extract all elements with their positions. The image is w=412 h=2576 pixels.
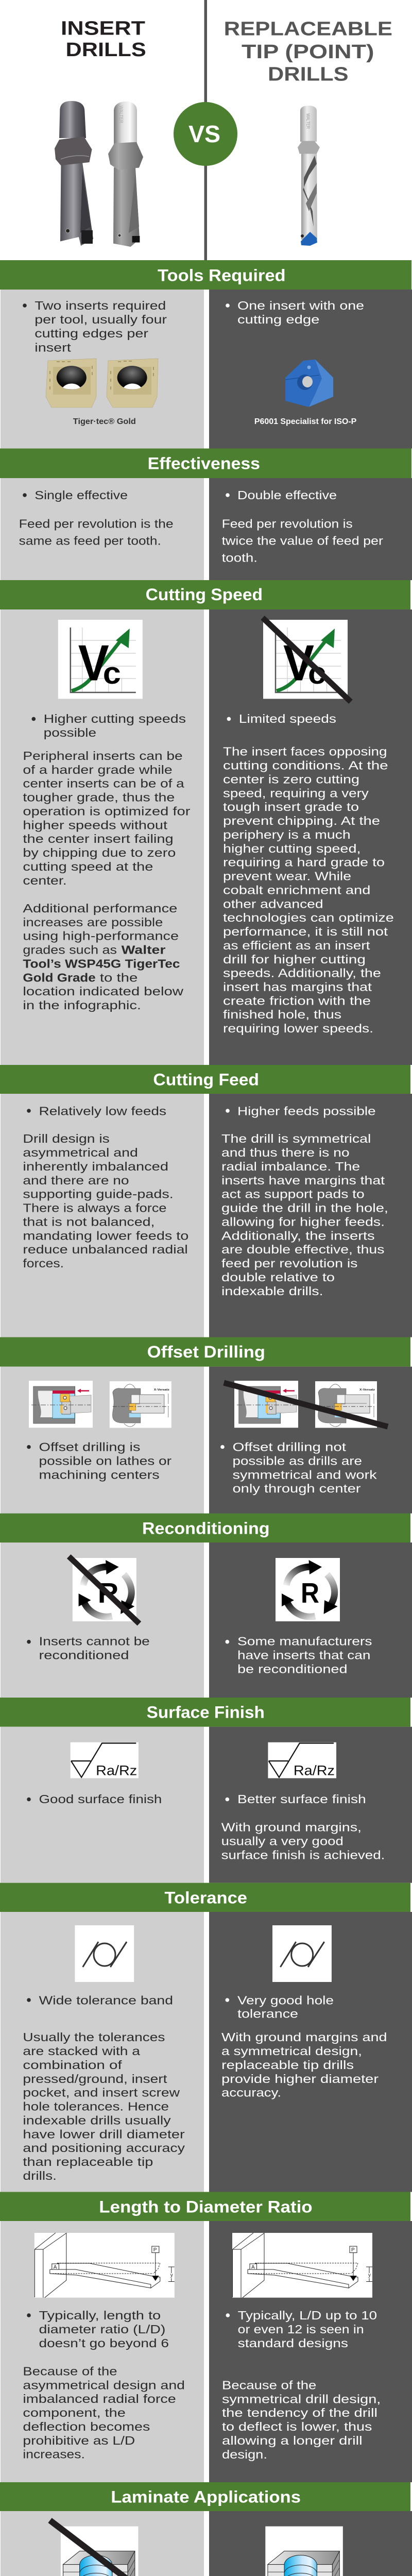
paragraph: tooth. bbox=[222, 551, 258, 564]
paragraph: There is always a force bbox=[23, 1201, 167, 1215]
heading bar: reconditioning: Reconditioning bbox=[142, 1519, 270, 1537]
bullet text: cutting edges per bbox=[35, 327, 148, 340]
paragraph: peripheral inserts: higher speeds without bbox=[23, 818, 168, 832]
paragraph: cobalt enrichment and bbox=[223, 883, 370, 896]
paragraph: Feed per revolution is the bbox=[19, 517, 174, 530]
paragraph: peripheral inserts bbox=[23, 749, 191, 887]
icon: vc chart bbox=[58, 620, 143, 699]
bullet text: Very good hole bbox=[237, 1994, 334, 2007]
paragraph: Because of the bbox=[222, 2378, 316, 2392]
paragraph: Because of the bbox=[23, 2365, 117, 2378]
title: insert drills: DRILLS bbox=[66, 39, 146, 61]
paragraph: mandating lower feeds to bbox=[23, 1229, 188, 1242]
image: dark insert drill bbox=[55, 101, 93, 246]
paragraph bbox=[23, 2365, 185, 2461]
panel: laminate, insert drills bbox=[1, 2511, 204, 2576]
bullet text: Relatively low feeds bbox=[39, 1104, 166, 1117]
bullet text bbox=[220, 1440, 377, 1495]
panel: offset drilling, replaceable tip bbox=[209, 1367, 412, 1514]
bullet text: Two inserts required bbox=[35, 299, 166, 312]
paragraph: peripheral inserts: the center insert failing bbox=[23, 832, 174, 845]
icon: offset diagram 2: X-Versatz bbox=[154, 1388, 169, 1392]
heading bar: offset drilling: Offset Drilling bbox=[147, 1343, 265, 1361]
paragraph: have lower drill diameter bbox=[23, 2127, 185, 2141]
icon: surface roughness: Ra/Rz bbox=[294, 1763, 335, 1778]
panel: tools required, insert drills bbox=[1, 290, 204, 448]
bullet text: insert bbox=[35, 341, 72, 354]
bullet text: only through center bbox=[233, 1482, 361, 1495]
title: insert drills bbox=[61, 18, 146, 61]
paragraph: asymmetrical and bbox=[23, 1146, 138, 1159]
bullet text: possible as drills are bbox=[233, 1454, 362, 1467]
bullet text: doesn’t go beyond 6 bbox=[39, 2336, 169, 2350]
paragraph: usually a very good bbox=[221, 1835, 344, 1848]
panel: effectiveness, replaceable tip bbox=[209, 478, 412, 580]
image: light insert drill bbox=[108, 101, 143, 247]
bullet text bbox=[226, 2309, 377, 2350]
title: replaceable tip drills: TIP (POINT) bbox=[242, 41, 374, 63]
bullet text: Offset drilling is bbox=[39, 1440, 140, 1453]
heading bar: tolerance bbox=[0, 1883, 410, 1912]
paragraph: speed, requiring a very bbox=[223, 786, 369, 800]
icon: vc chart: c bbox=[103, 656, 121, 690]
paragraph: additional performance: Tool’s WSP45G TigerTec bbox=[23, 957, 180, 971]
heading bar: tolerance: Tolerance bbox=[164, 1888, 247, 1907]
heading bar: cutting feed bbox=[0, 1065, 410, 1094]
paragraph: to deflect is lower, thus bbox=[222, 2420, 372, 2433]
paragraph: requiring a hard grade to bbox=[223, 856, 385, 869]
section: reconditioning bbox=[0, 1514, 412, 1698]
paragraph: additional performance: grades such as bbox=[23, 943, 117, 957]
paragraph: replaceable tip drills bbox=[221, 2058, 354, 2072]
panel: tools required, replaceable tip bbox=[209, 290, 412, 448]
panel: cutting speed, replaceable tip bbox=[209, 609, 412, 1065]
image: tiger-tec gold inserts bbox=[46, 359, 158, 408]
heading bar: tools required bbox=[0, 260, 411, 290]
paragraph: a symmetrical design, bbox=[221, 2044, 362, 2058]
paragraph: accuracy. bbox=[221, 2086, 281, 2099]
bullet text: reconditioned bbox=[39, 1649, 129, 1662]
title: replaceable tip drills bbox=[224, 18, 392, 85]
bullet text: standard designs bbox=[238, 2336, 348, 2350]
bullet text: symmetrical and work bbox=[233, 1468, 377, 1481]
paragraph: hole tolerances. Hence bbox=[23, 2100, 169, 2113]
bullet text bbox=[23, 299, 167, 354]
bullet text: Better surface finish bbox=[237, 1792, 366, 1806]
section: effectiveness bbox=[0, 448, 412, 580]
paragraph: technologies can optimize bbox=[223, 911, 394, 924]
vs badge bbox=[174, 102, 237, 166]
paragraph: allowing a longer drill bbox=[222, 2434, 363, 2447]
paragraph: provide higher diameter bbox=[221, 2072, 379, 2086]
paragraph: insert has margins that bbox=[223, 980, 372, 993]
section: length to diameter ratio bbox=[0, 2192, 412, 2482]
icon: cantilever deflection: y bbox=[170, 2273, 173, 2278]
section: surface finish bbox=[0, 1698, 412, 1883]
icon: tolerance symbol bbox=[75, 1925, 134, 1982]
section: offset drilling bbox=[0, 1337, 412, 1514]
image: blue p6001 tip bbox=[285, 360, 333, 407]
panel: reconditioning, insert drills bbox=[1, 1543, 204, 1698]
paragraph: deflection becomes bbox=[23, 2420, 150, 2433]
paragraph: performance, it is still not bbox=[223, 925, 388, 938]
panel: tolerance, insert drills bbox=[1, 1912, 204, 2192]
paragraph: additional performance: Walter bbox=[122, 943, 165, 957]
paragraph: indexable drills usually bbox=[23, 2113, 171, 2127]
icon: vc chart struck through: V bbox=[283, 635, 314, 691]
paragraph: peripheral inserts: operation is optimized for bbox=[23, 805, 191, 818]
bullet text: Inserts cannot be bbox=[39, 1635, 150, 1648]
paragraph: act as support pads to bbox=[221, 1188, 365, 1201]
title: replaceable tip drills: REPLACEABLE bbox=[224, 18, 392, 40]
paragraph: indexable drills. bbox=[221, 1284, 323, 1298]
bullet text: Higher cutting speeds bbox=[44, 712, 186, 725]
vertical divider bbox=[204, 0, 207, 260]
paragraph: additional performance: using high-performance bbox=[23, 929, 179, 943]
heading bar: tools required: Tools Required bbox=[158, 266, 286, 285]
paragraph: design. bbox=[222, 2448, 267, 2461]
paragraph: pressed/ground, insert bbox=[23, 2072, 167, 2086]
paragraph: peripheral inserts: center. bbox=[23, 874, 67, 887]
bullet text: Limited speeds bbox=[239, 712, 336, 725]
strike line bbox=[69, 1556, 139, 1623]
panel: cutting feed, replaceable tip bbox=[209, 1094, 412, 1337]
panel: length to diameter, replaceable tip bbox=[209, 2221, 412, 2482]
paragraph: than replaceable tip bbox=[23, 2155, 153, 2168]
panel: surface finish, replaceable tip bbox=[209, 1727, 412, 1883]
paragraph: periphery is a much bbox=[223, 828, 351, 841]
paragraph: that is not balanced, bbox=[23, 1215, 155, 1228]
bullet text: diameter ratio (L/D) bbox=[39, 2323, 165, 2336]
panel: length to diameter, insert drills bbox=[1, 2221, 204, 2482]
icon: offset diagram 1 bbox=[29, 1381, 93, 1428]
paragraph: and thus there is no bbox=[221, 1146, 350, 1159]
paragraph: With ground margins, bbox=[221, 1821, 362, 1834]
section: cutting speed bbox=[0, 580, 412, 1065]
paragraph: prevent wear. While bbox=[223, 870, 351, 883]
icon: laminate stack bbox=[61, 2527, 138, 2576]
heading bar: cutting speed bbox=[0, 580, 410, 609]
image: replaceable tip drill: WALTER bbox=[305, 113, 311, 129]
bullet text: cutting edge bbox=[237, 313, 319, 326]
paragraph: peripheral inserts: center inserts can be of a bbox=[23, 777, 184, 790]
paragraph bbox=[221, 2030, 387, 2099]
heading bar: cutting feed: Cutting Feed bbox=[153, 1070, 259, 1089]
paragraph bbox=[23, 1132, 188, 1270]
paragraph: Usually the tolerances bbox=[23, 2030, 165, 2044]
paragraph: reduce unbalanced radial bbox=[23, 1243, 188, 1256]
panel: surface finish, insert drills bbox=[1, 1727, 204, 1883]
paragraph: The drill is symmetrical bbox=[221, 1132, 371, 1145]
paragraph: With ground margins and bbox=[221, 2030, 387, 2044]
paragraph: prevent chipping. At the bbox=[223, 814, 380, 827]
icon: recondition R: R bbox=[301, 1577, 319, 1609]
section: tolerance bbox=[0, 1883, 412, 2192]
paragraph: center is zero cutting bbox=[223, 772, 359, 786]
paragraph: peripheral inserts: tougher grade, thus the bbox=[23, 791, 175, 804]
bullet text: Wide tolerance band bbox=[39, 1994, 173, 2007]
paragraph: as efficient as an insert bbox=[223, 939, 370, 952]
paragraph: and there are no bbox=[23, 1174, 129, 1187]
icon: recondition R struck bbox=[73, 1558, 136, 1621]
bullet text: Typically, length to bbox=[39, 2309, 161, 2322]
paragraph: component, the bbox=[23, 2406, 126, 2419]
heading bar: effectiveness: Effectiveness bbox=[148, 454, 260, 472]
paragraph: Additionally, the inserts bbox=[221, 1229, 375, 1242]
heading bar: laminate applications: Laminate Applications bbox=[111, 2488, 301, 2506]
paragraph bbox=[223, 745, 394, 1035]
paragraph: additional performance: Additional performance bbox=[23, 902, 177, 915]
paragraph bbox=[222, 2378, 381, 2461]
bullet text: tolerance bbox=[237, 2007, 298, 2021]
paragraph: pocket, and insert screw bbox=[23, 2086, 180, 2099]
paragraph: guide the drill in the hole, bbox=[221, 1201, 388, 1215]
caption: p6001: P6001 Specialist for ISO-P bbox=[254, 417, 357, 426]
paragraph: supporting guide-pads. bbox=[23, 1188, 174, 1201]
section: laminate applications bbox=[0, 2482, 412, 2576]
paragraph: same as feed per tooth. bbox=[19, 534, 161, 547]
paragraph bbox=[23, 2030, 185, 2182]
paragraph bbox=[19, 517, 174, 547]
paragraph: prohibitive as L/D bbox=[23, 2434, 135, 2447]
panel: offset drilling, insert drills bbox=[1, 1367, 204, 1514]
icon: tolerance symbol bbox=[272, 1925, 332, 1982]
paragraph: asymmetrical design and bbox=[23, 2378, 185, 2392]
header: replaceable tip drills column bbox=[224, 18, 392, 246]
paragraph: symmetrical drill design, bbox=[222, 2392, 381, 2405]
caption: tiger-tec gold: Tiger·tec® Gold bbox=[73, 417, 136, 426]
paragraph: forces. bbox=[23, 1257, 64, 1270]
paragraph: increases. bbox=[23, 2448, 85, 2461]
paragraph: tough insert grade to bbox=[223, 800, 359, 814]
paragraph: surface finish is achieved. bbox=[221, 1848, 385, 1861]
icon: surface roughness: Ra/Rz bbox=[96, 1763, 137, 1778]
panel: effectiveness, insert drills bbox=[1, 478, 204, 580]
bullet text bbox=[27, 1440, 171, 1481]
paragraph: peripheral inserts: by chipping due to zero bbox=[23, 846, 176, 859]
paragraph: The insert faces opposing bbox=[223, 745, 387, 758]
panel: cutting speed, insert drills bbox=[1, 609, 204, 1065]
bullet text: Double effective bbox=[237, 488, 337, 502]
icon: cantilever deflection: P bbox=[153, 2247, 157, 2253]
paragraph: are double effective, thus bbox=[221, 1243, 384, 1256]
heading bar: reconditioning bbox=[0, 1514, 410, 1543]
bullet text: or even 12 is seen in bbox=[238, 2323, 364, 2336]
strike line bbox=[224, 1383, 388, 1427]
heading bar: length to diameter ratio: Length to Diameter Ratio bbox=[99, 2197, 313, 2216]
bullet text: One insert with one bbox=[237, 299, 364, 312]
paragraph: finished hole, thus bbox=[223, 1008, 341, 1021]
paragraph bbox=[221, 1821, 385, 1861]
bullet text: Single effective bbox=[35, 488, 128, 502]
bullet text bbox=[226, 1635, 372, 1675]
section: tools required bbox=[0, 260, 412, 448]
paragraph: drill for higher cutting bbox=[223, 953, 366, 966]
icon: surface roughness bbox=[71, 1742, 139, 1778]
heading bar: surface finish: Surface Finish bbox=[147, 1703, 265, 1722]
icon: vc chart: V bbox=[78, 635, 109, 691]
paragraph: speeds. Additionally, the bbox=[223, 967, 381, 980]
paragraph: inserts have margins that bbox=[221, 1174, 385, 1187]
bullet text bbox=[27, 1635, 150, 1662]
paragraph: drills. bbox=[23, 2169, 57, 2182]
bullet text bbox=[27, 2309, 169, 2350]
icon: cantilever deflection bbox=[35, 2233, 175, 2298]
heading bar: length to diameter ratio bbox=[0, 2192, 410, 2221]
bullet text: Higher feeds possible bbox=[237, 1104, 376, 1117]
paragraph: the tendency of the drill bbox=[222, 2406, 377, 2419]
paragraph: peripheral inserts: cutting speed at the bbox=[23, 860, 153, 873]
icon: cantilever deflection: A bbox=[54, 2265, 57, 2270]
paragraph: double relative to bbox=[221, 1270, 335, 1284]
paragraph bbox=[222, 517, 383, 564]
heading bar: offset drilling bbox=[0, 1337, 410, 1367]
icon: offset diagram 2 bbox=[315, 1381, 377, 1428]
heading bar: effectiveness bbox=[0, 448, 411, 478]
icon: cantilever deflection: P bbox=[351, 2247, 355, 2253]
paragraph: and positioning accuracy bbox=[23, 2141, 185, 2155]
paragraph: additional performance: Gold Grade bbox=[23, 971, 96, 984]
strike line bbox=[50, 2520, 152, 2576]
panel: laminate, replaceable tip bbox=[209, 2511, 412, 2576]
heading bar: surface finish bbox=[0, 1698, 410, 1727]
icon: cantilever deflection: A bbox=[251, 2265, 255, 2270]
bullet text: Some manufacturers bbox=[237, 1635, 372, 1648]
paragraph: feed per revolution is bbox=[221, 1257, 357, 1270]
paragraph bbox=[221, 1132, 388, 1298]
section: cutting feed bbox=[0, 1065, 412, 1337]
paragraph: Feed per revolution is bbox=[222, 517, 353, 530]
bullet text: have inserts that can bbox=[237, 1649, 370, 1662]
icon: laminate stack bbox=[265, 2527, 343, 2576]
bullet text: Offset drilling not bbox=[233, 1440, 347, 1453]
bullet text: per tool, usually four bbox=[35, 313, 167, 326]
paragraph: Drill design is bbox=[23, 1132, 110, 1145]
paragraph: additional performance bbox=[23, 902, 183, 1012]
paragraph: are stacked with a bbox=[23, 2044, 140, 2058]
panel: reconditioning, replaceable tip bbox=[209, 1543, 412, 1698]
bullet text: machining centers bbox=[39, 1468, 160, 1481]
paragraph: requiring lower speeds. bbox=[223, 1022, 373, 1035]
heading bar: cutting speed: Cutting Speed bbox=[146, 585, 263, 604]
panel: cutting feed, insert drills bbox=[1, 1094, 204, 1337]
paragraph: radial imbalance. The bbox=[221, 1160, 360, 1173]
bullet text bbox=[32, 712, 186, 739]
icon: offset diagram 1 bbox=[234, 1381, 298, 1428]
paragraph: additional performance: to the bbox=[100, 971, 138, 984]
title: replaceable tip drills: DRILLS bbox=[268, 63, 348, 85]
bullet text: be reconditioned bbox=[237, 1662, 347, 1675]
paragraph: peripheral inserts: of a harder grade while bbox=[23, 763, 173, 776]
image: light insert drill: WALTER bbox=[118, 106, 124, 123]
strike line bbox=[263, 618, 351, 702]
paragraph: higher cutting speed, bbox=[223, 842, 360, 855]
header: insert drills column bbox=[55, 18, 146, 247]
panel: tolerance, replaceable tip bbox=[209, 1912, 412, 2192]
paragraph: additional performance: location indicated below bbox=[23, 985, 183, 998]
icon: recondition R bbox=[276, 1558, 340, 1621]
paragraph: combination of bbox=[23, 2058, 122, 2072]
paragraph: twice the value of feed per bbox=[222, 534, 383, 547]
image: replaceable tip drill bbox=[298, 106, 320, 246]
title: insert drills: INSERT bbox=[61, 18, 145, 40]
vs badge: VS bbox=[188, 121, 220, 147]
paragraph: peripheral inserts: Peripheral inserts can be bbox=[23, 749, 183, 762]
bullet text bbox=[226, 1994, 334, 2021]
icon: cantilever deflection bbox=[232, 2233, 372, 2298]
bullet text: possible on lathes or bbox=[39, 1454, 171, 1467]
bullet text bbox=[226, 299, 364, 326]
paragraph: additional performance: in the infographic. bbox=[23, 998, 141, 1012]
paragraph: other advanced bbox=[223, 897, 323, 910]
icon: vc chart struck through bbox=[263, 620, 348, 699]
icon: recondition R struck: R bbox=[98, 1577, 119, 1609]
icon: offset diagram 2: X-Versatz bbox=[359, 1388, 375, 1392]
icon: offset diagram 2 bbox=[110, 1381, 171, 1428]
heading bar: laminate applications bbox=[0, 2482, 410, 2511]
paragraph: cutting conditions. At the bbox=[223, 759, 388, 772]
icon: vc chart struck through: c bbox=[308, 656, 326, 690]
icon: cantilever deflection: y bbox=[368, 2273, 371, 2278]
paragraph: create friction with the bbox=[223, 994, 371, 1007]
bullet text: Good surface finish bbox=[39, 1792, 162, 1806]
bullet text: possible bbox=[44, 726, 96, 739]
icon: surface roughness bbox=[268, 1742, 336, 1778]
paragraph: additional performance: increases are possible bbox=[23, 916, 163, 929]
paragraph: allowing for higher feeds. bbox=[221, 1215, 385, 1228]
bullet text: Typically, L/D up to 10 bbox=[238, 2309, 377, 2322]
paragraph: inherently imbalanced bbox=[23, 1160, 168, 1173]
paragraph: imbalanced radial force bbox=[23, 2392, 176, 2405]
